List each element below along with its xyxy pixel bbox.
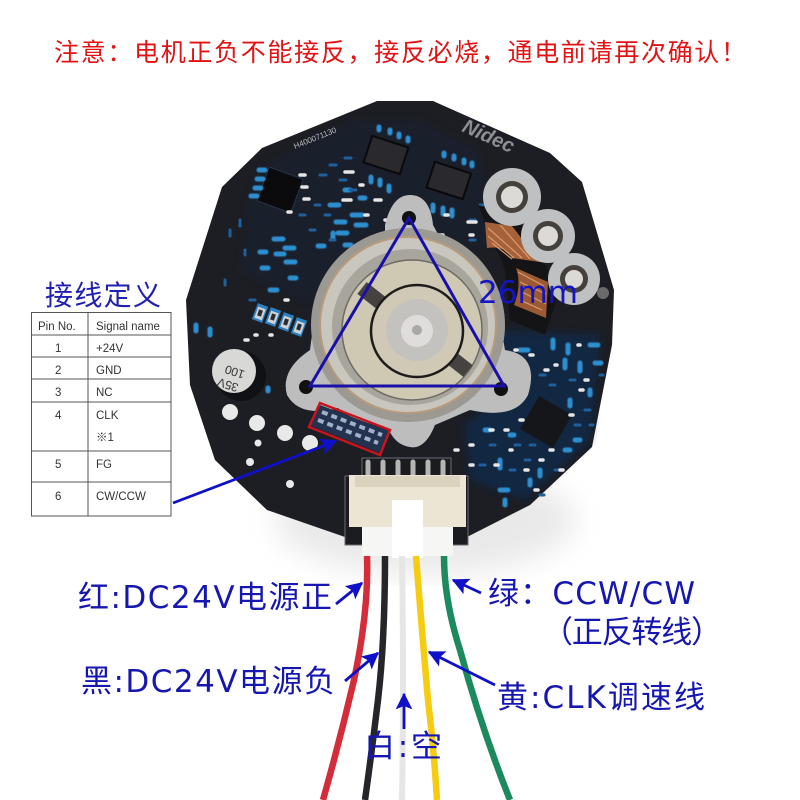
- part number: H400071130: [292, 125, 338, 151]
- row 5: 5: [55, 459, 61, 471]
- coil turns: [488, 225, 546, 310]
- chip resistors: [257, 305, 302, 335]
- bearing face: [342, 260, 482, 400]
- bronze ring: [320, 237, 496, 413]
- terminal 3: [560, 265, 588, 293]
- row 6: 6: [55, 491, 61, 503]
- table header name: Signal name: [96, 321, 160, 333]
- bearing black ring: [371, 285, 463, 377]
- connector socket outline: [345, 458, 468, 545]
- black wire: [365, 556, 385, 800]
- copper coil: [478, 168, 609, 335]
- inner ring: [332, 249, 488, 405]
- row 1: 1: [55, 343, 61, 355]
- label: red wire: 红:DC24V电源正: [78, 580, 332, 616]
- shaft centre: [412, 325, 422, 335]
- ic chip: left: [257, 167, 303, 213]
- pin label marks: [318, 412, 382, 443]
- coil winding lower: [514, 268, 548, 318]
- shaft: [386, 299, 448, 361]
- central white block: [392, 500, 423, 558]
- connector body: [349, 475, 466, 527]
- capacitor value marking: 100: [223, 362, 246, 382]
- row 4 signal: CLK: [96, 410, 119, 422]
- mounting holes: [299, 211, 508, 396]
- bright blue components: [196, 127, 601, 505]
- arrow: yellow wire: [429, 652, 495, 685]
- row 3: 3: [55, 387, 61, 399]
- ic chip: centre: [364, 136, 408, 174]
- connector top band: [355, 476, 460, 487]
- hub: [286, 195, 531, 447]
- arrow: red wire: [336, 583, 362, 604]
- row 1 signal: +24V: [96, 343, 124, 355]
- row 6 signal: CW/CCW: [96, 491, 146, 503]
- row 4: 4: [55, 410, 62, 422]
- pcb outline: [186, 101, 614, 537]
- coil winding: [485, 222, 540, 262]
- ic chip: right: [427, 162, 471, 199]
- capacitor top: [212, 349, 256, 393]
- label: green wire note: （正反转线）: [542, 615, 722, 651]
- arrow: black wire: [345, 653, 378, 681]
- stator backing: [478, 205, 560, 335]
- outer ring: [311, 228, 505, 422]
- warning title: 注意：电机正负不能接反，接反必烧，通电前请再次确认！: [54, 39, 746, 67]
- row 2 signal: GND: [96, 365, 122, 377]
- blue trace zone: top: [240, 120, 490, 300]
- pin label text block: [311, 405, 389, 453]
- green wire: [444, 556, 510, 800]
- solder pads: [222, 404, 318, 488]
- row 2: 2: [55, 365, 61, 377]
- terminal pad 3: [548, 253, 600, 305]
- label: green wire: 绿：CCW/CW: [488, 576, 695, 612]
- small blue specks: [225, 158, 603, 495]
- terminal 2: [533, 221, 563, 251]
- row 5 signal: FG: [96, 459, 112, 471]
- capacitor voltage marking: 35V: [215, 375, 240, 395]
- white solder points: [245, 172, 588, 490]
- terminal pad 1: [483, 168, 541, 226]
- dimension triangle: [310, 218, 504, 386]
- pin label box: [309, 403, 390, 455]
- label: black wire: 黑:DC24V电源负: [81, 664, 335, 700]
- label: yellow wire: 黄:CLK调速线: [497, 680, 705, 716]
- blue trace zone: lower right: [465, 330, 600, 500]
- connector: [345, 458, 468, 558]
- row 4 note: ※1: [96, 432, 114, 444]
- label: white wire: 白:空: [364, 729, 442, 765]
- arrow: white wire: [403, 694, 405, 729]
- resistor plates: [258, 308, 301, 333]
- shaft slot: [362, 288, 468, 371]
- electrolytic capacitor: [212, 349, 266, 401]
- soft shadow: [275, 465, 575, 575]
- motor board: [186, 101, 614, 558]
- mounting hole: [597, 287, 609, 299]
- table frame: [32, 312, 171, 516]
- red highlight rectangle: [309, 403, 390, 455]
- resistor bodies: [257, 305, 302, 335]
- ic chip: lower right: [520, 396, 572, 448]
- connector pins: [368, 462, 443, 480]
- row 3 signal: NC: [96, 387, 113, 399]
- nidec logo: Nidec: [459, 115, 518, 158]
- dimension label: 26mm: [478, 275, 578, 311]
- white wire: [402, 556, 403, 800]
- capacitor body: [216, 351, 266, 401]
- terminal pad 2: [521, 209, 575, 263]
- resistor centres: [259, 310, 300, 330]
- arrow: table to pin labels: [173, 441, 336, 503]
- pin table heading: 接线定义: [45, 280, 161, 311]
- connector housing: [362, 527, 453, 556]
- red wire: [323, 556, 367, 800]
- pin table: [32, 312, 171, 516]
- terminal 1: [496, 181, 528, 213]
- yellow wire: [416, 556, 437, 800]
- table header: Pin No.: [38, 321, 76, 333]
- arrow: green wire: [453, 580, 481, 593]
- terminal 3 solder: [565, 270, 583, 288]
- wires: [323, 556, 510, 800]
- terminal 2 solder: [538, 226, 558, 246]
- terminal 1 solder: [501, 186, 523, 208]
- flange lobes: [286, 195, 531, 447]
- shaft highlight: [401, 315, 433, 347]
